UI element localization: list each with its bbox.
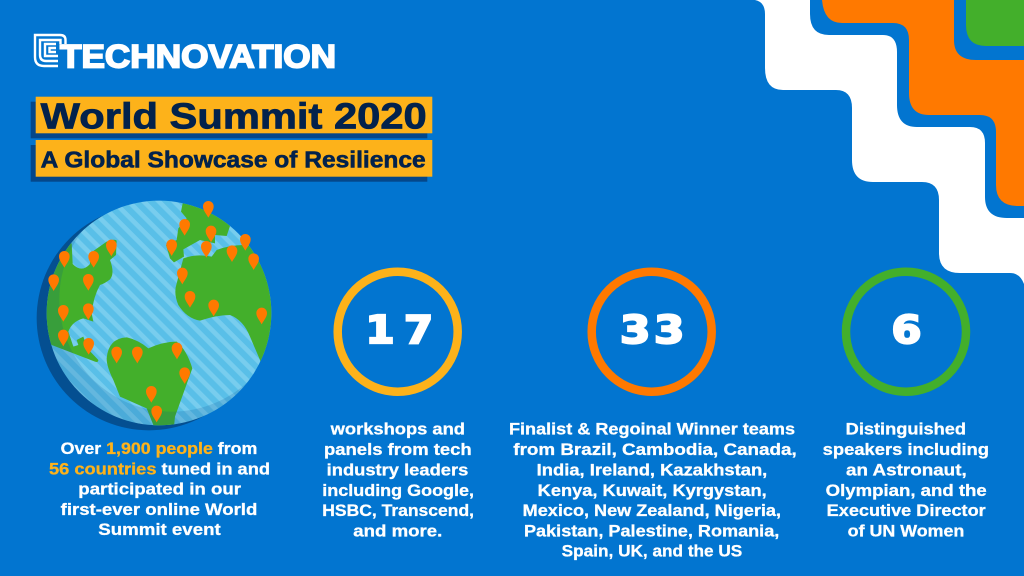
text: teams description: India, Ireland, Kazakhstan, (537, 462, 767, 480)
text: globe caption: Summit event (98, 521, 221, 539)
title: World Summit 2020: World Summit 2020 (41, 95, 427, 136)
text: globe caption: 56 countries tuned in and (49, 460, 270, 478)
number: 6: 6 (892, 308, 922, 352)
text: workshops description: panels from tech (324, 441, 472, 459)
text: globe caption: first-ever online World (61, 501, 257, 519)
text: speakers description (823, 420, 989, 540)
text: globe caption: Over 1,900 people from (61, 440, 257, 458)
text: globe caption (49, 440, 270, 539)
text: teams description: Kenya, Kuwait, Kyrgystan, (538, 482, 767, 500)
subtitle: A Global Showcase of Resilience: A Global Showcase of Resilience (41, 147, 426, 173)
text: workshops description: HSBC, Transcend, (322, 502, 474, 520)
text: teams description: from Brazil, Cambodia, Canada, (513, 441, 797, 459)
stat: 33 (509, 272, 797, 561)
text: speakers description: Distinguished (846, 420, 966, 438)
stat: 17 (322, 272, 474, 540)
number: 33: 33 (620, 308, 684, 352)
text: teams description: Spain, UK, and the US (562, 543, 742, 561)
text: speakers description: of UN Women (848, 522, 964, 540)
text: teams description: Pakistan, Palestine, Romania, (524, 522, 779, 540)
subtitle: A Global Showcase of Resilience (31, 140, 432, 182)
decorative corner: stepped bands (755, 0, 1024, 284)
text: workshops description (322, 420, 474, 540)
text: teams description: Finalist & Regoinal Winner teams (509, 420, 795, 438)
text: globe caption: participated in our (78, 480, 242, 498)
text: teams description (509, 420, 797, 561)
ring: green (846, 272, 966, 392)
text: workshops description: and more. (353, 522, 442, 540)
ring: orange (592, 272, 712, 392)
text: speakers description: speakers including (823, 441, 989, 459)
text: speakers description: Executive Director (827, 502, 986, 520)
ring: yellow (338, 272, 458, 392)
text: speakers description: Olympian, and the (826, 482, 987, 500)
text: workshops description: including Google, (322, 482, 474, 500)
map pins (48, 201, 267, 422)
logo wordmark: TECHNOVATION (60, 38, 336, 74)
text: workshops description: industry leaders (327, 462, 468, 480)
globe shading (46, 231, 246, 426)
globe illustration (36, 200, 272, 430)
text: teams description: Mexico, New Zealand, Nigeria, (523, 502, 781, 520)
stat: 6 (823, 272, 989, 540)
text: workshops description: workshops and (330, 420, 465, 438)
icon: logo mark (35, 35, 66, 66)
text: speakers description: an Astronaut, (846, 462, 967, 480)
globe ocean (47, 201, 271, 425)
number: 17: 17 (366, 309, 433, 353)
continents (46, 203, 272, 426)
logo: Technovation (35, 35, 336, 74)
globe shadow (37, 206, 261, 430)
